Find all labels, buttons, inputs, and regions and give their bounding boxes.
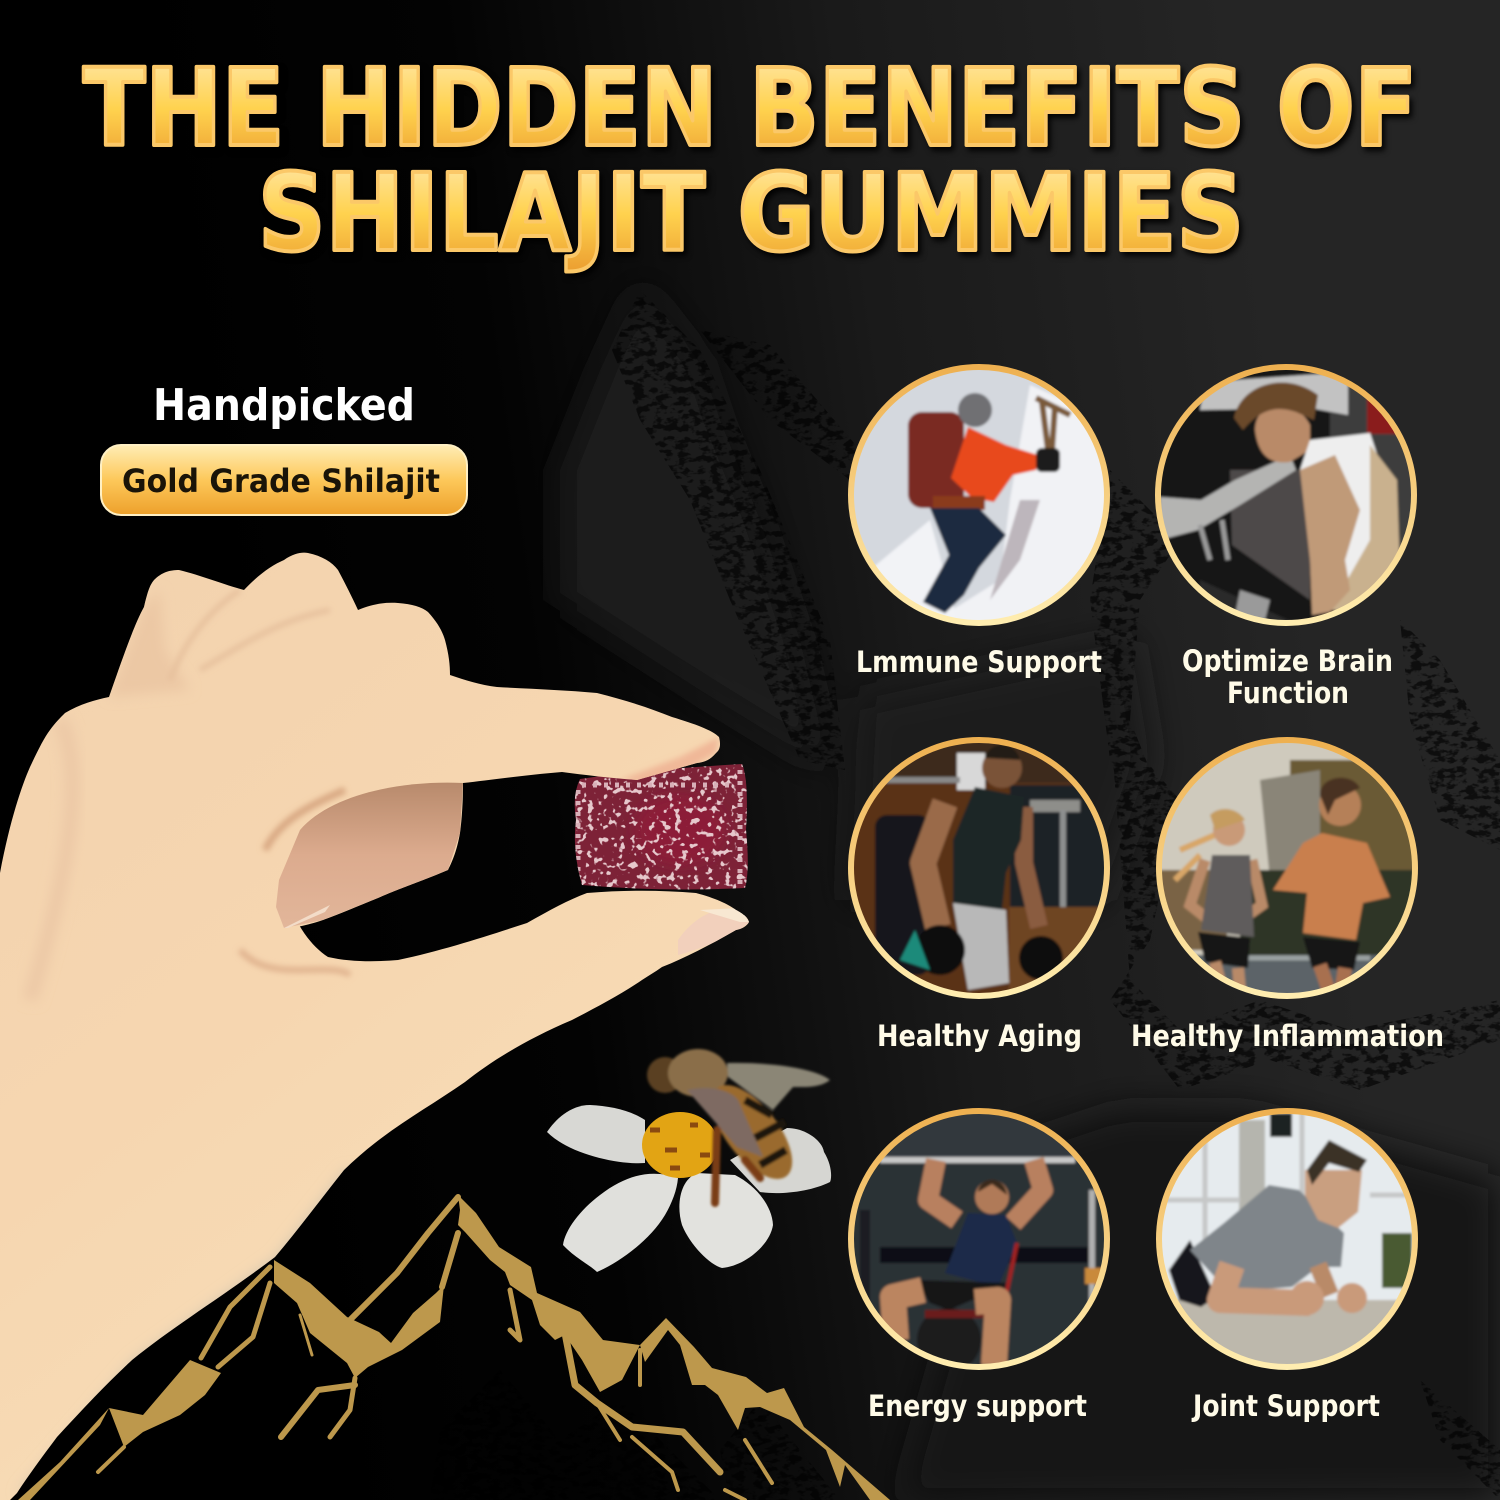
- photo: joint support: [1162, 1114, 1412, 1364]
- flower: [547, 1105, 831, 1272]
- photo rings: [851, 367, 1415, 1367]
- photo: immune support: [850, 365, 1110, 630]
- hand: [0, 540, 760, 1500]
- gold mountains: [18, 1195, 890, 1500]
- gold grade badge: Gold Grade Shilajit: [122, 462, 440, 500]
- gold grade badge: [101, 445, 467, 515]
- benefit labels: Joint Support: [1191, 1389, 1380, 1423]
- title: SHILAJIT GUMMIES: [258, 152, 1244, 276]
- benefit labels: Healthy Inflammation: [1131, 1019, 1444, 1053]
- benefit labels: Lmmune Support: [856, 645, 1102, 679]
- benefit labels: Healthy Aging: [877, 1019, 1082, 1053]
- handpicked label: Handpicked: [153, 380, 415, 431]
- photo: energy support: [850, 1110, 1110, 1372]
- gummy: [574, 764, 748, 890]
- background dark mountains: [430, 283, 1500, 1500]
- benefit labels: Energy support: [868, 1389, 1087, 1423]
- bee: [647, 1049, 830, 1203]
- benefit labels: Optimize Brain: [1182, 644, 1393, 678]
- photo: brain function: [1161, 370, 1411, 620]
- title: [83, 47, 1417, 276]
- benefit labels: Function: [1227, 676, 1349, 710]
- benefit labels: [856, 644, 1444, 1423]
- photo: healthy inflammation: [1162, 743, 1412, 993]
- rock texture: [430, 290, 1500, 1500]
- photo: healthy aging: [850, 738, 1110, 998]
